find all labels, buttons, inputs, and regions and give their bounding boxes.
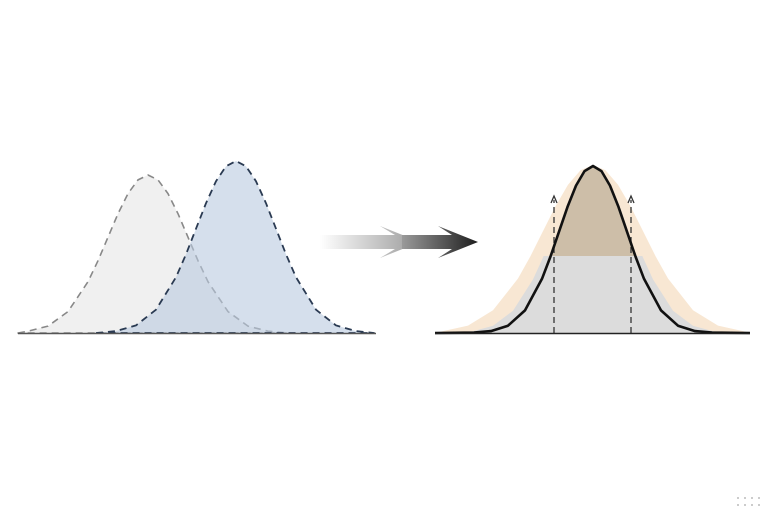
orange wide distribution <box>437 165 750 333</box>
curve: gray distribution <box>18 175 288 333</box>
panel: after distribution <box>435 165 750 334</box>
watermark dots <box>737 497 760 506</box>
baseline <box>18 332 376 334</box>
curve: blue distribution <box>96 161 374 333</box>
dashed markers with arrows <box>551 196 634 333</box>
arrow: transformation <box>320 226 478 258</box>
gray lower region <box>472 256 714 333</box>
black target curve <box>435 166 750 333</box>
panel: before distributions <box>18 161 376 334</box>
tan upper region <box>552 168 634 256</box>
baseline <box>435 332 750 334</box>
